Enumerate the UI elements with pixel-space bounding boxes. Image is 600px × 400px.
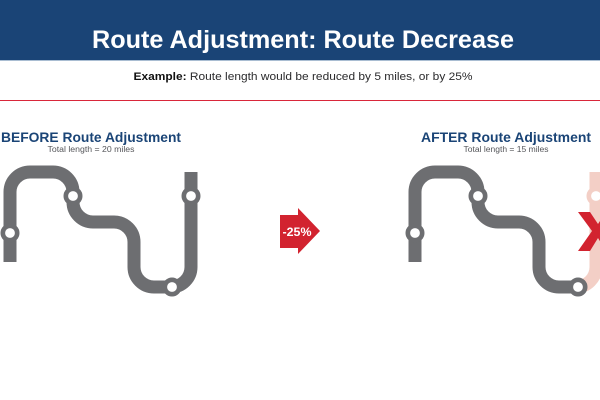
red X mark bbox=[578, 212, 600, 251]
station: bottom bbox=[165, 280, 179, 294]
station: left bbox=[3, 226, 17, 240]
heading: after route bbox=[421, 129, 591, 154]
heading: after route: Total length = 15 miles bbox=[464, 145, 548, 154]
arrow: -25% change: -25% bbox=[282, 227, 312, 239]
removed station bbox=[589, 189, 600, 203]
arrow: -25% change bbox=[280, 208, 320, 254]
remaining route bbox=[415, 172, 577, 287]
header band bbox=[0, 0, 600, 61]
route map: after bbox=[408, 172, 600, 294]
example text: Example: Route length would be reduced by 5 miles, or by 25% bbox=[134, 71, 473, 83]
heading: before route: BEFORE Route Adjustment bbox=[1, 129, 181, 145]
station: upper middle bbox=[471, 189, 485, 203]
removed route segment bbox=[574, 172, 596, 287]
heading: before route: Total length = 20 miles bbox=[48, 145, 134, 154]
title: Route Adjustment: Route Decrease bbox=[92, 26, 514, 54]
station: upper middle bbox=[66, 189, 80, 203]
heading: after route: AFTER Route Adjustment bbox=[421, 129, 591, 145]
heading: before route bbox=[1, 129, 181, 154]
station: left bbox=[408, 226, 422, 240]
route map: before bbox=[3, 172, 198, 294]
station: bottom bbox=[571, 280, 585, 294]
station: right bbox=[184, 189, 198, 203]
